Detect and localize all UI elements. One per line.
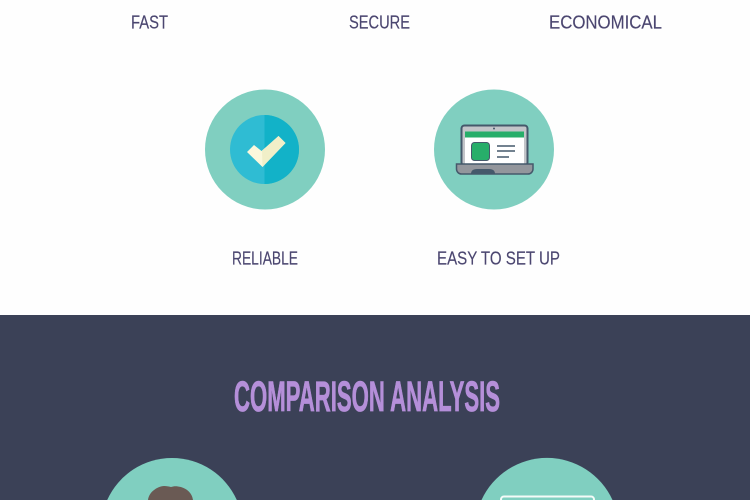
label: economical: ECONOMICAL xyxy=(549,12,662,32)
icon: reliable check mark xyxy=(205,90,325,210)
icon: person avatar xyxy=(107,458,237,500)
icon: laptop setup xyxy=(434,90,554,210)
icon: comparison screen xyxy=(482,458,612,500)
label: reliable: RELIABLE xyxy=(232,248,298,268)
label: secure: SECURE xyxy=(349,12,410,32)
label: easy to set up: EASY TO SET UP xyxy=(437,248,560,268)
label: fast: FAST xyxy=(131,12,168,32)
heading: comparison analysis: COMPARISON ANALYSIS xyxy=(234,373,500,421)
panel: comparison analysis xyxy=(0,315,750,500)
